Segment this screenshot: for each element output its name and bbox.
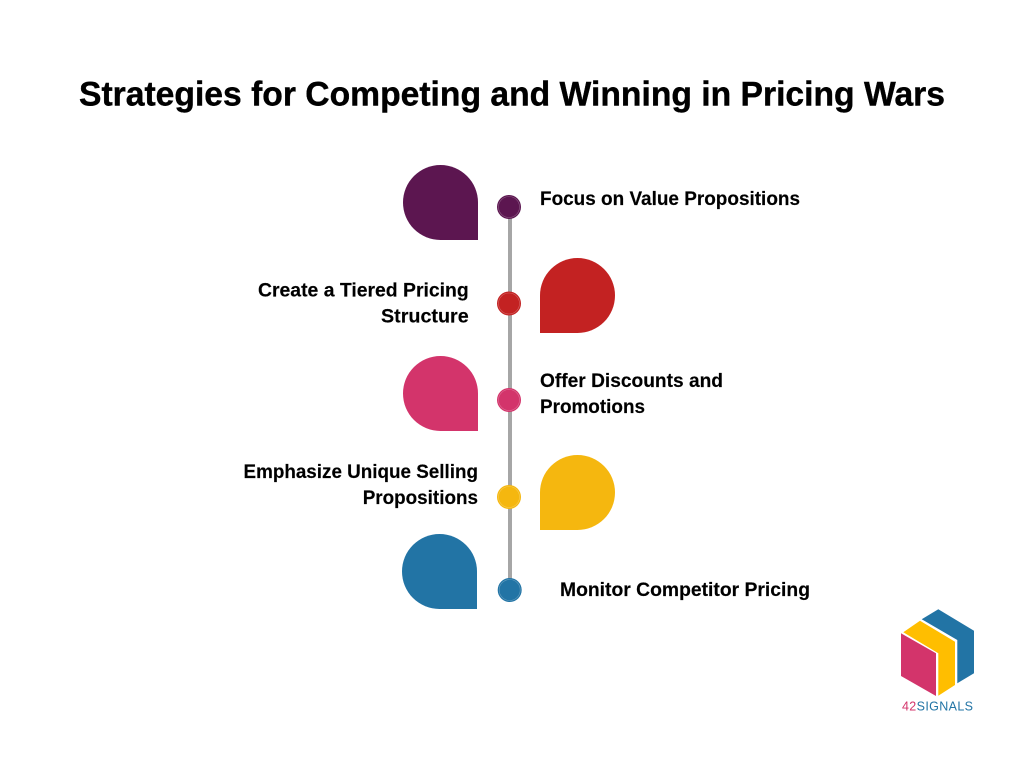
label: emphasize unique selling propositions: Propositions [363,488,478,509]
label: emphasize unique selling propositions [244,462,478,509]
drop: pink [403,356,478,431]
label: offer discounts and promotions [540,371,723,418]
vertical line [508,212,512,584]
step 4 marker [497,485,521,509]
label: create a tiered pricing structure: Create a Tiered Pricing [258,281,469,302]
logo wordmark: 42SIGNALS [902,700,973,714]
drop: yellow [540,455,615,530]
label: emphasize unique selling propositions: Emphasize Unique Selling [244,462,478,483]
step 2 marker [497,292,521,316]
label: focus on value propositions: Focus on Value Propositions [540,189,800,210]
drop: red [540,258,615,333]
label: offer discounts and promotions: Promotions [540,397,645,418]
label: create a tiered pricing structure: Structure [381,307,469,328]
title: Strategies for Competing and Winning in Pricing Wars [79,76,945,114]
step 5 marker [498,578,522,602]
step 3 marker [497,388,521,412]
drop: blue [402,534,477,609]
icon: cube [901,609,974,696]
timeline [497,195,522,602]
label: create a tiered pricing structure [258,281,469,328]
step 1 marker [497,195,521,219]
drop: purple [403,165,478,240]
label: offer discounts and promotions: Offer Discounts and [540,371,723,392]
logo: 42signals [901,609,974,714]
label: monitor competitor pricing: Monitor Competitor Pricing [560,580,810,601]
